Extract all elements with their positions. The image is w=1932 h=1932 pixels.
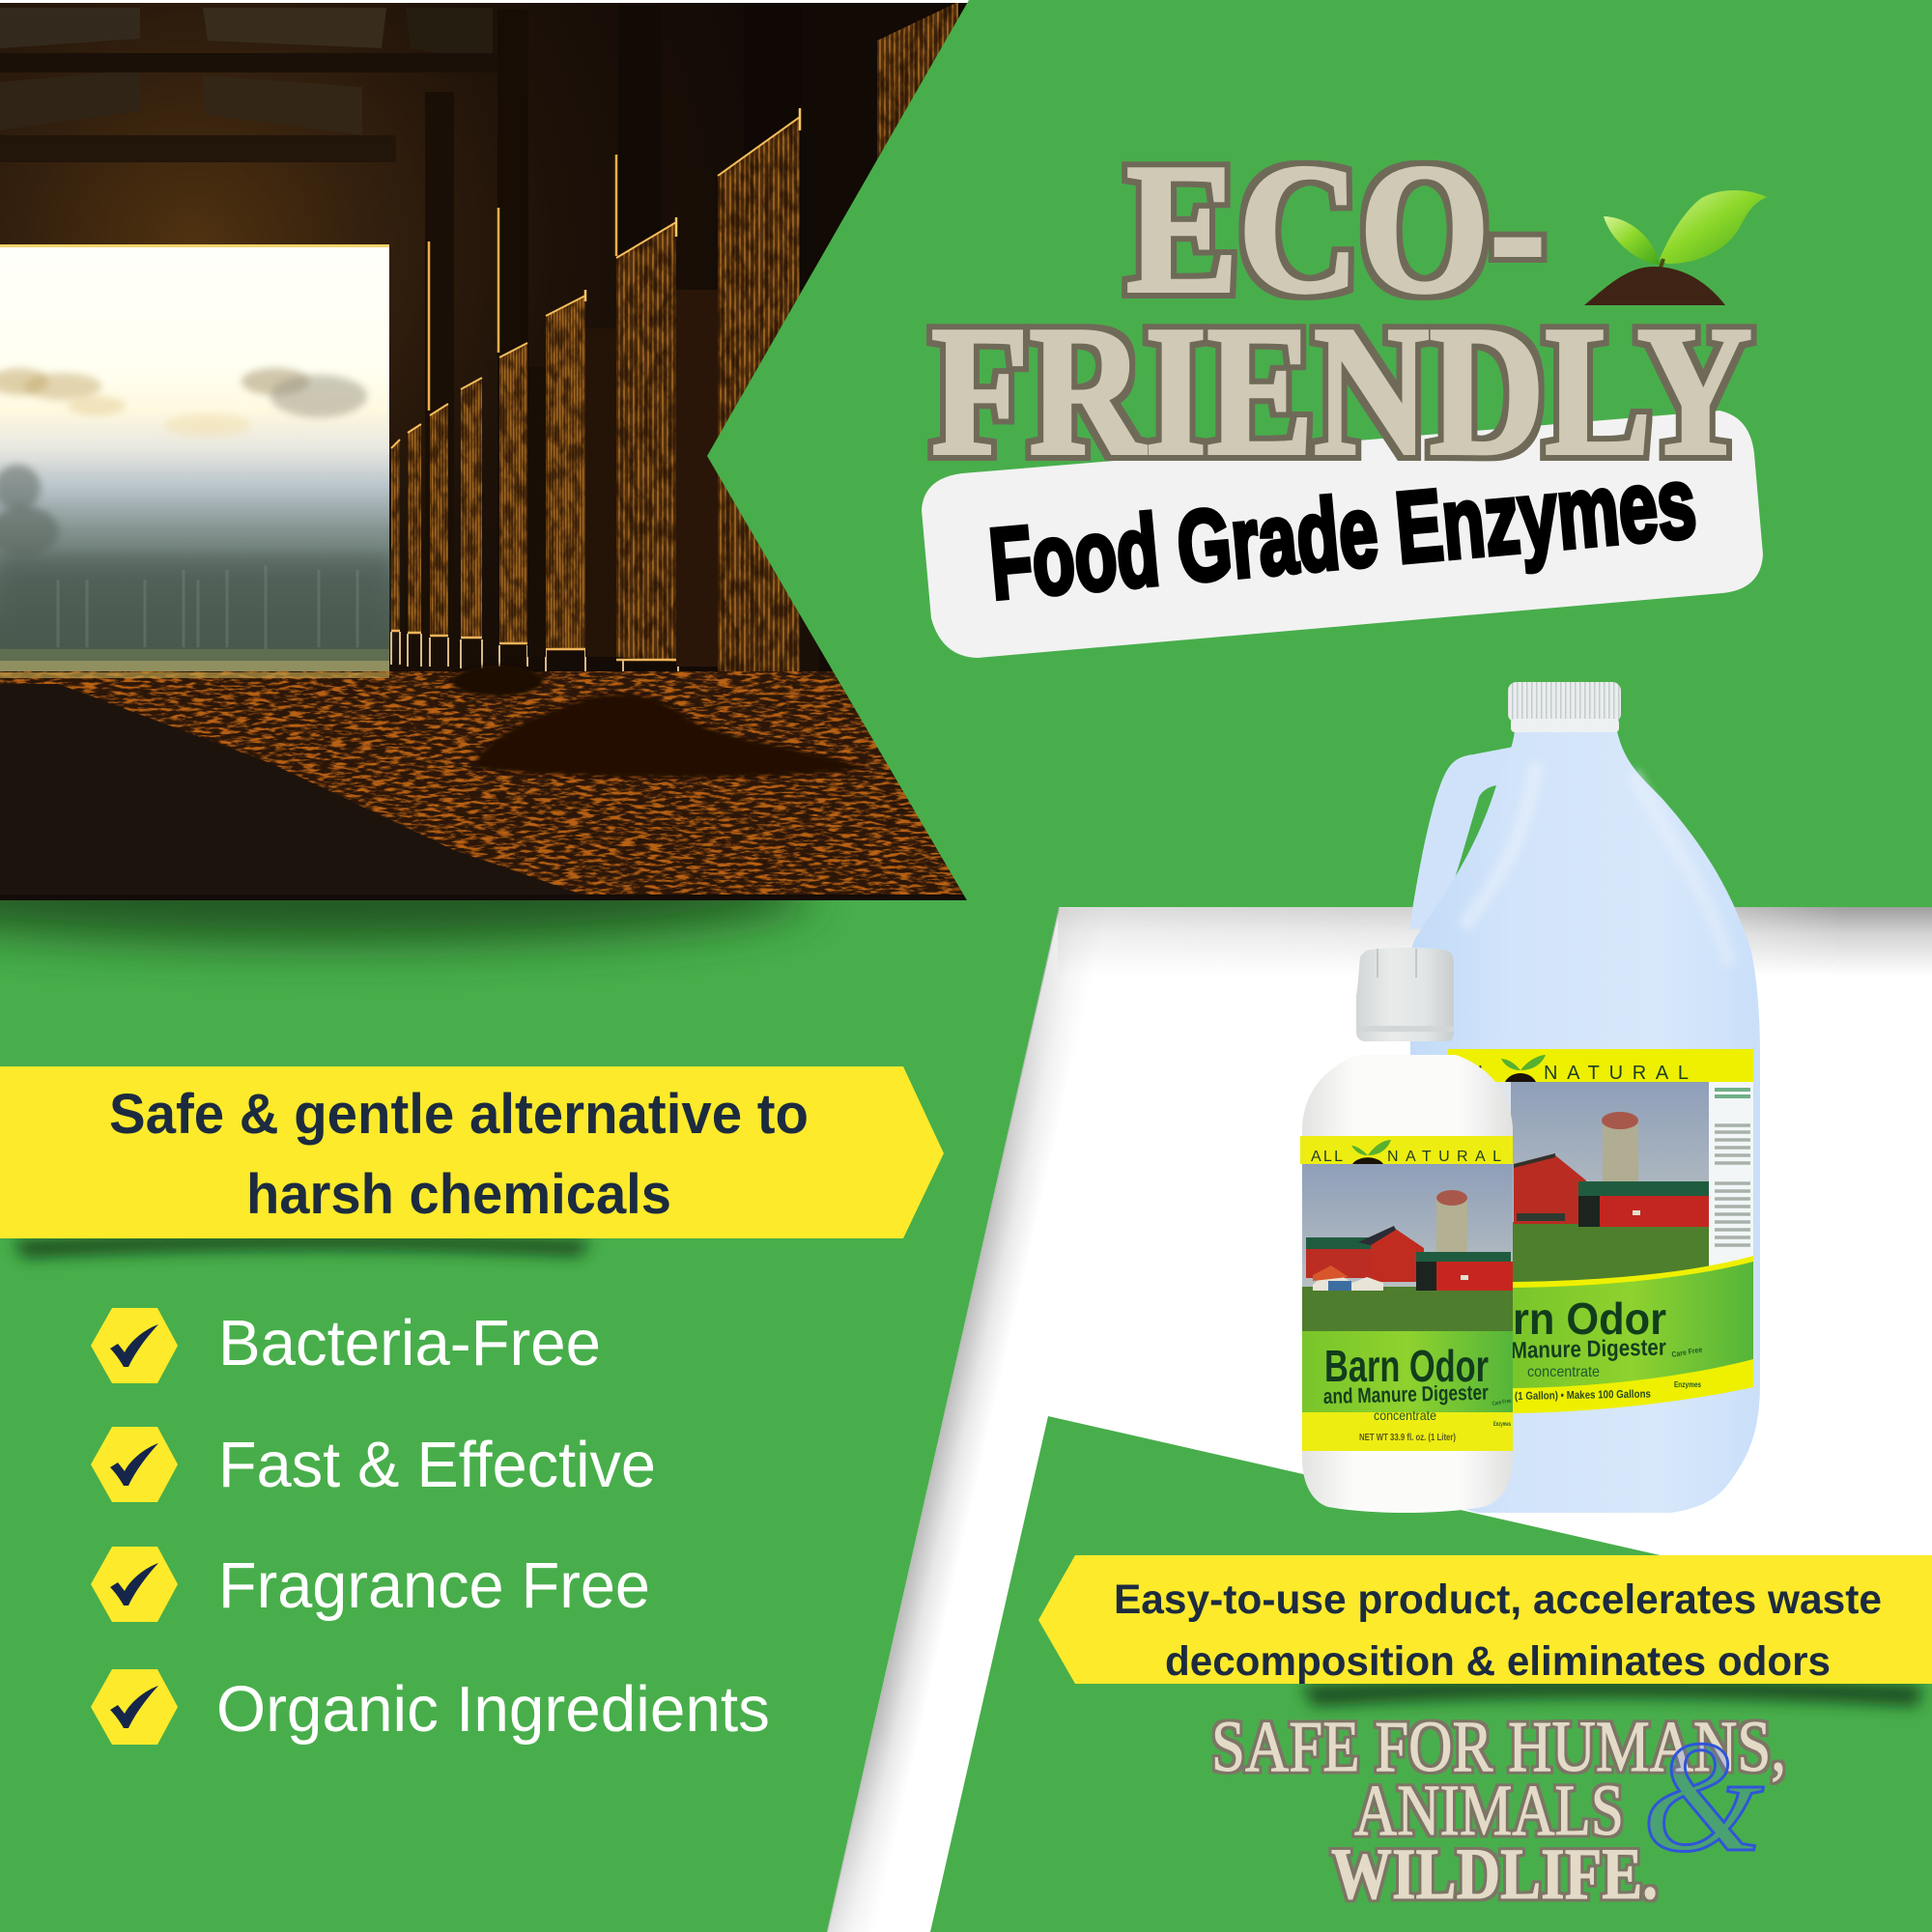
panel: lower right green [930,1416,1932,1932]
gallon label: rn Odor [1513,1293,1666,1344]
product: one gallon jug [1409,682,1760,1513]
banner: safe and gentle [0,1066,944,1238]
panel: barn photograph [0,0,976,903]
list item: Fragrance Free: Fragrance Free [218,1549,650,1622]
banner: easy to use: decomposition & eliminates odors [1165,1638,1831,1685]
heading: Eco-Friendly: FRIENDLY [931,288,1752,494]
product: one liter bottle [1300,948,1513,1513]
shadow under photo [0,843,811,944]
gallon label: Care Free [1671,1345,1703,1359]
list item: Fast and Effective: Fast & Effective [218,1429,656,1501]
liter label: ALL [1311,1149,1343,1165]
slogan: safe for humans, animals and wildlife: WILDLIFE. [1331,1834,1658,1915]
shadow under left banner [13,1234,591,1258]
slogan: safe for humans, animals and wildlife [1211,1707,1786,1915]
liter label: Care Free [1492,1399,1513,1407]
liter cap [1356,948,1454,1041]
liter label: Enzymes [1493,1422,1511,1428]
panel: top green arrow panel [707,0,1932,907]
opening with misty trees [0,244,389,678]
heading: Eco-Friendly: ECO- [1126,126,1546,331]
ampersand: & [1642,1708,1764,1885]
gallon cap [1508,682,1621,732]
shadow fade on diagonal [828,908,1140,1932]
stall doors [390,3,958,671]
list item: Bacteria-Free [91,1307,601,1383]
gallon label: NATURAL [1544,1063,1689,1084]
gallon sprout [1501,1055,1546,1082]
heading: Eco-Friendly [931,126,1752,494]
banner: safe and gentle: harsh chemicals [246,1163,671,1226]
label sprout [1351,1140,1391,1164]
liter label: NATURAL [1387,1149,1501,1165]
gallon label: LL [1459,1063,1489,1084]
banner: easy to use: Easy-to-use product, accelerates waste [1114,1577,1882,1623]
liter label: concentrate [1374,1407,1436,1423]
barn floor [0,666,976,903]
banner: safe and gentle: Safe & gentle alternative to [109,1083,809,1146]
gallon label [1448,1049,1753,1413]
slogan: safe for humans, animals and wildlife: SAFE FOR HUMANS, [1211,1707,1786,1787]
liter label: Barn Odor [1324,1341,1489,1391]
banner: easy to use [1038,1555,1932,1685]
liter label [1300,1136,1513,1451]
list item: Bacteria-Free: Bacteria-Free [218,1307,601,1379]
shadow under right banner [1301,1679,1922,1706]
liter label: and Manure Digester [1322,1380,1489,1408]
gallon label: (1 Gallon) • Makes 100 Gallons [1515,1389,1651,1403]
gallon label: Manure Digester [1511,1335,1666,1364]
icon: seedling [1584,190,1767,305]
shadow along white diagonal [827,908,1121,1932]
heading: white pill [922,411,1763,658]
shadow under top panel [1058,907,1932,968]
liter label: NET WT 33.9 fl. oz. (1 Liter) [1359,1432,1456,1443]
list item: Organic Ingredients: Organic Ingredients [216,1673,770,1746]
gallon label: concentrate [1527,1364,1600,1380]
panel: lower left green [0,898,1063,1932]
slogan: safe for humans, animals and wildlife: ANIMALS [1354,1771,1624,1851]
gallon label: Enzymes [1674,1380,1701,1389]
